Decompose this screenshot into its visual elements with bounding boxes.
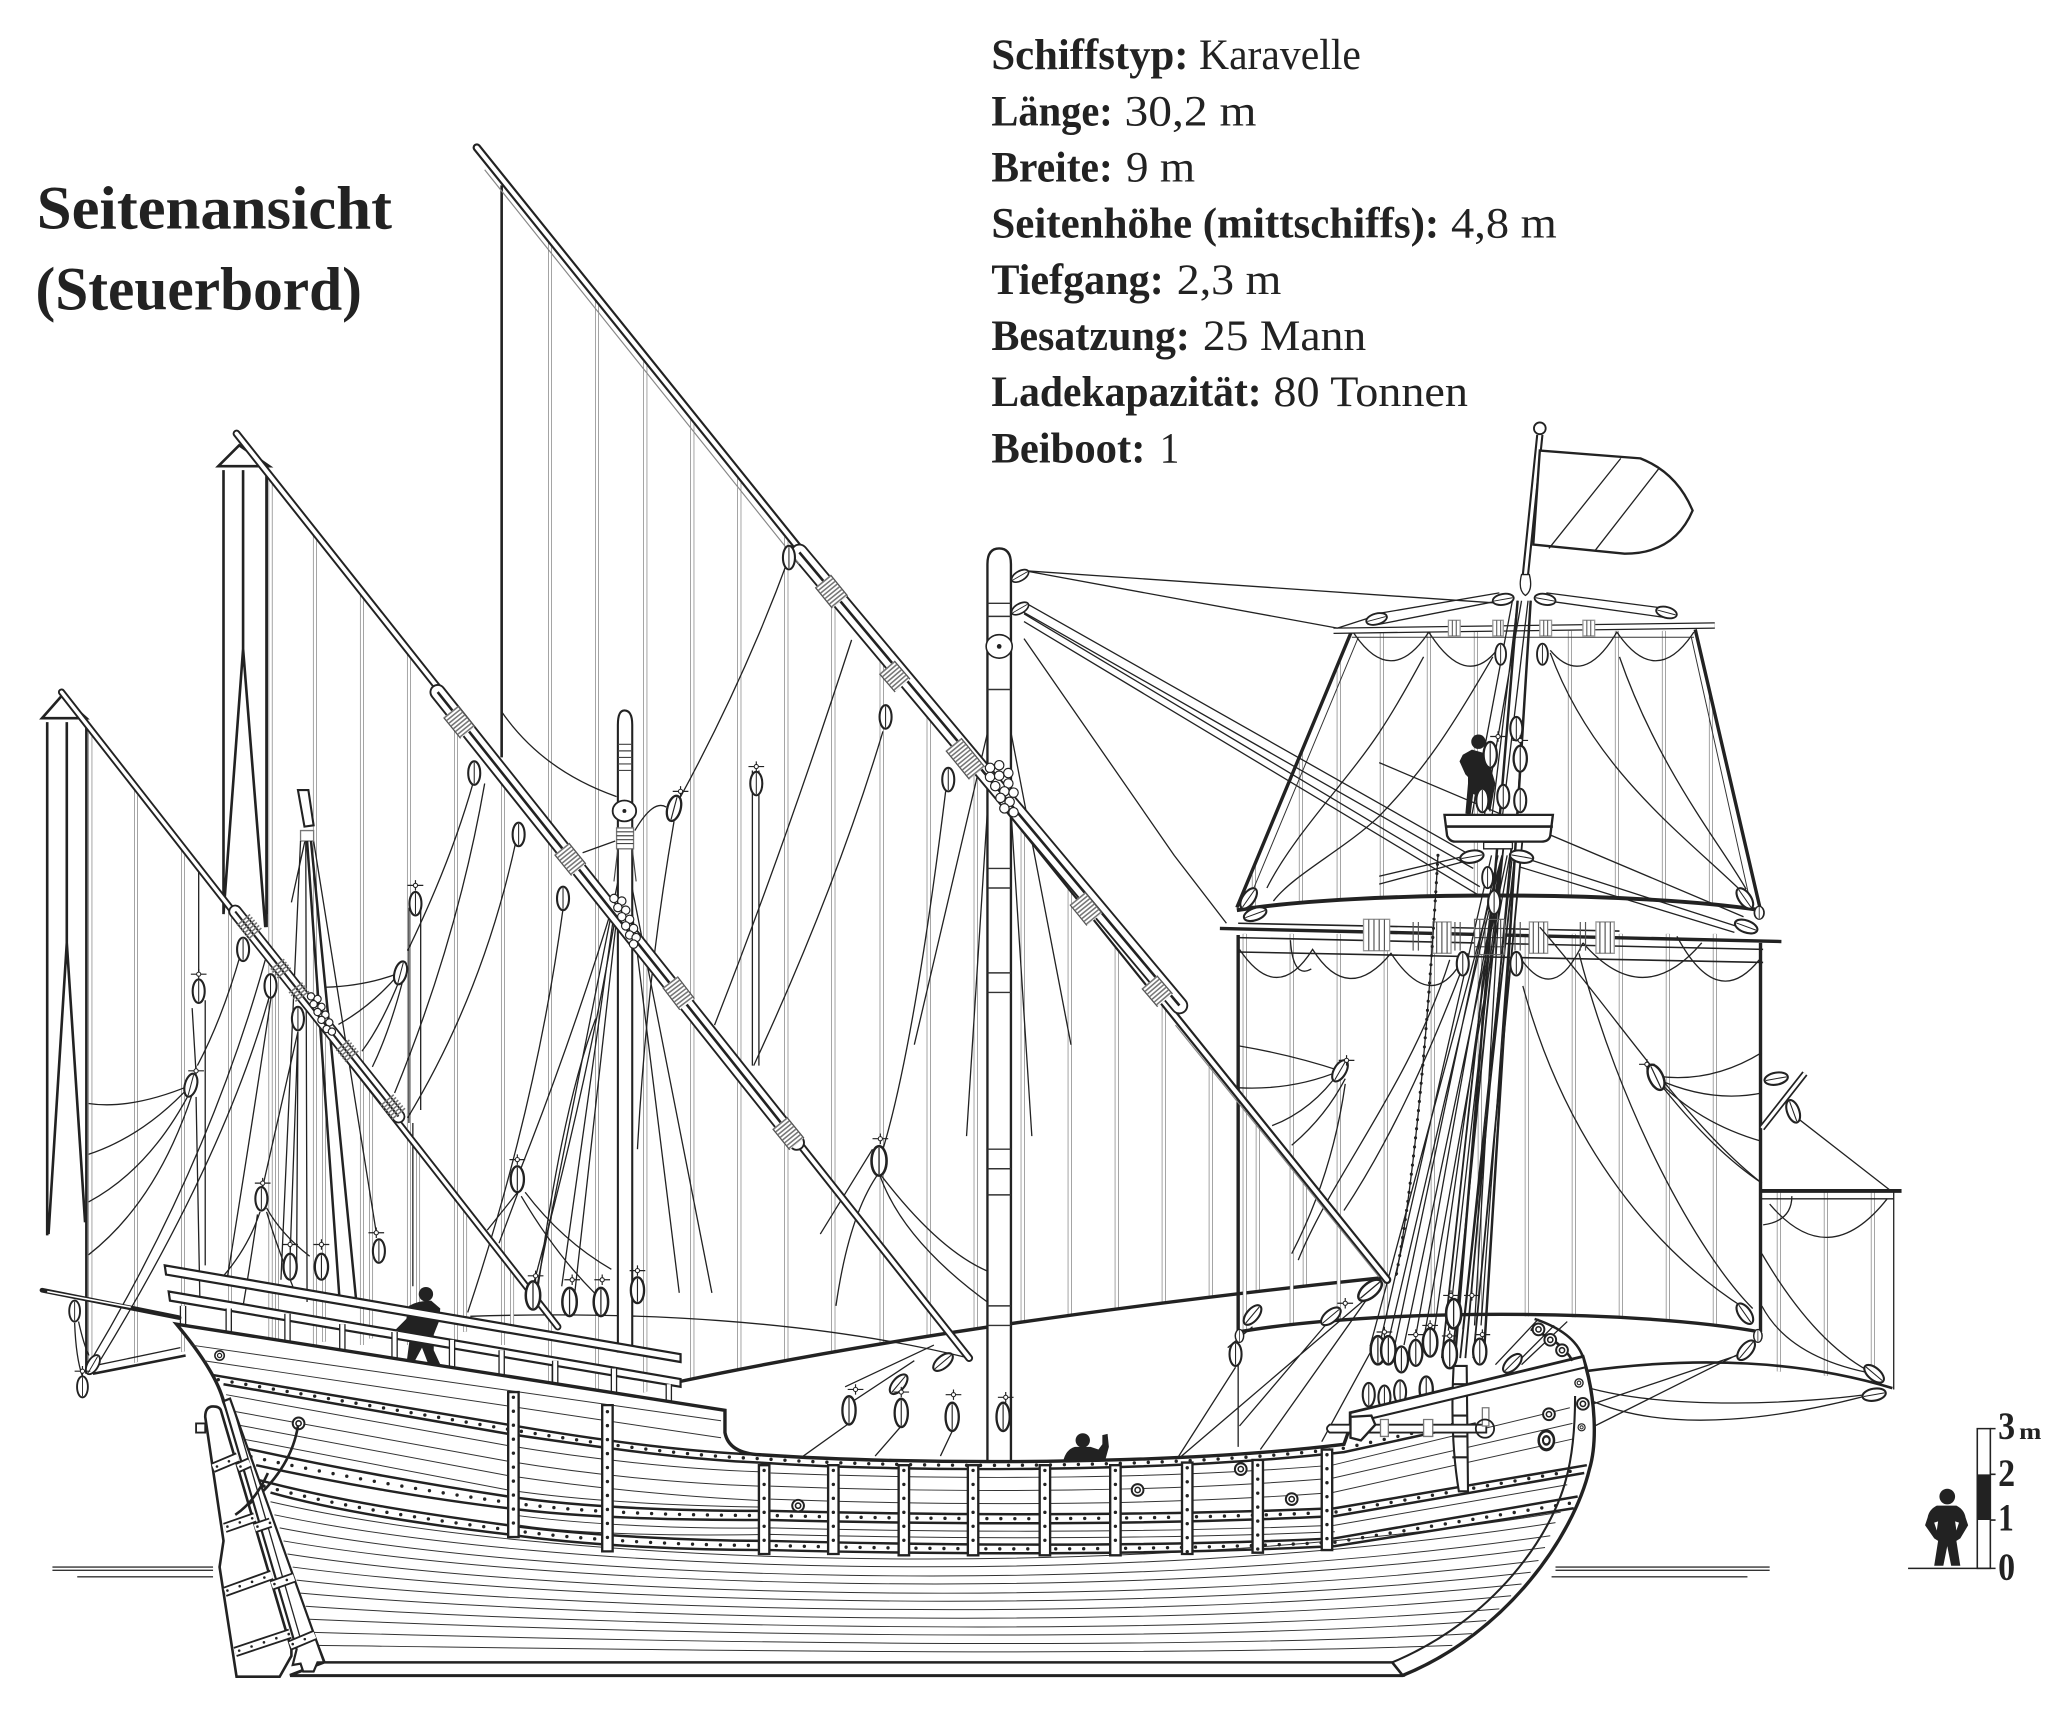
sail blocks	[69, 546, 1887, 1431]
ship specifications text	[991, 32, 1557, 472]
main yard	[1220, 919, 1781, 962]
water lines	[52, 1567, 1770, 1577]
lower hull planks	[271, 1502, 1561, 1652]
ship specifications text: 9 m	[1126, 145, 1195, 192]
scale person silhouette	[1925, 1489, 1968, 1566]
crow's nest	[1444, 815, 1553, 849]
scale bar	[1977, 1429, 1990, 1568]
furled pennant: left	[42, 696, 86, 1235]
furled pennant: middle	[218, 445, 269, 927]
ship specifications text: Besatzung:	[991, 313, 1190, 360]
ship specifications text: 30,2 m	[1125, 88, 1256, 135]
ship specifications text: Seitenhöhe (mittschiffs):	[991, 201, 1439, 248]
ship specifications text: Ladekapazität:	[991, 369, 1262, 416]
scale labels	[1998, 1405, 2042, 1589]
stern inner curve	[1392, 1396, 1575, 1662]
topsail	[1237, 614, 1761, 914]
scale bar with person	[1908, 1405, 2042, 1589]
main course sail	[1238, 927, 1761, 1345]
title: (Steuerbord)	[35, 255, 362, 323]
ship specifications text: 80 Tonnen	[1273, 369, 1468, 416]
flag	[1520, 422, 1693, 595]
sailor silhouette on deck	[1063, 1433, 1109, 1461]
title: Seitenansicht	[37, 175, 393, 243]
scale labels: 2	[1998, 1452, 2015, 1495]
rigging ropes	[75, 558, 1762, 1461]
ship specifications text: Breite:	[991, 145, 1113, 192]
title	[35, 175, 393, 323]
ship specifications text: 1	[1160, 425, 1179, 472]
rudder with pintles at bow side	[196, 1399, 324, 1677]
gun ports and rings	[215, 1351, 1589, 1512]
vertical riders	[508, 1392, 1332, 1555]
anchor rope	[235, 1426, 298, 1515]
parrel beads on yards	[307, 761, 1018, 1035]
scale labels: 0	[1998, 1546, 2015, 1589]
aft deck beam	[1350, 1357, 1586, 1423]
dotted ladder rope	[1396, 855, 1438, 1276]
ship specifications text: Tiefgang:	[991, 257, 1164, 304]
forecastle railings	[165, 1265, 681, 1408]
mainmast (middle)	[613, 710, 636, 1352]
sailor silhouette on forecastle	[396, 1287, 442, 1367]
ship specifications text: 2,3 m	[1177, 257, 1281, 304]
small lateen yard	[62, 692, 558, 1327]
wales with rivets	[213, 1375, 1587, 1553]
lateen sail: small	[85, 728, 514, 1375]
scale labels: 1	[1998, 1496, 2014, 1539]
ship specifications text: Karavelle	[1199, 32, 1361, 79]
lateen sail: largest	[502, 131, 1387, 1436]
bowsprit	[42, 1290, 179, 1318]
ship specifications text: Länge:	[991, 88, 1113, 135]
ship specifications text: 4,8 m	[1451, 201, 1557, 248]
upper hull planks	[191, 1345, 1572, 1538]
anchor and stock on aft deck	[1327, 1408, 1494, 1440]
stern gallery spars and lantern rings	[1495, 1319, 1583, 1376]
hull body outline	[176, 1324, 1594, 1675]
hull	[176, 1319, 1594, 1675]
middle lateen yard	[237, 434, 969, 1358]
large lateen yard	[477, 148, 1387, 1280]
small block crosses	[75, 731, 1655, 1403]
foremast (centre)	[986, 548, 1012, 1469]
scale labels: m	[2019, 1419, 2042, 1445]
ship specifications text: 25 Mann	[1203, 313, 1366, 360]
lookout silhouette in crow's nest	[1460, 735, 1495, 815]
topsail yard	[1333, 593, 1715, 637]
lateen sail: middle	[265, 476, 964, 1358]
anchor rope front	[235, 1473, 268, 1515]
rider rivets	[513, 1397, 1327, 1554]
rudder head at stern	[1452, 1366, 1468, 1491]
keel strip	[290, 1662, 1403, 1675]
mizzen mast (left)	[281, 790, 357, 1306]
scale labels: 3	[1998, 1405, 2015, 1448]
mast with top, right	[1442, 601, 1531, 1358]
ship specifications text: Schiffstyp:	[991, 32, 1189, 79]
spritsail at stern	[1586, 1073, 1902, 1429]
ship specifications text: Beiboot:	[991, 425, 1145, 472]
